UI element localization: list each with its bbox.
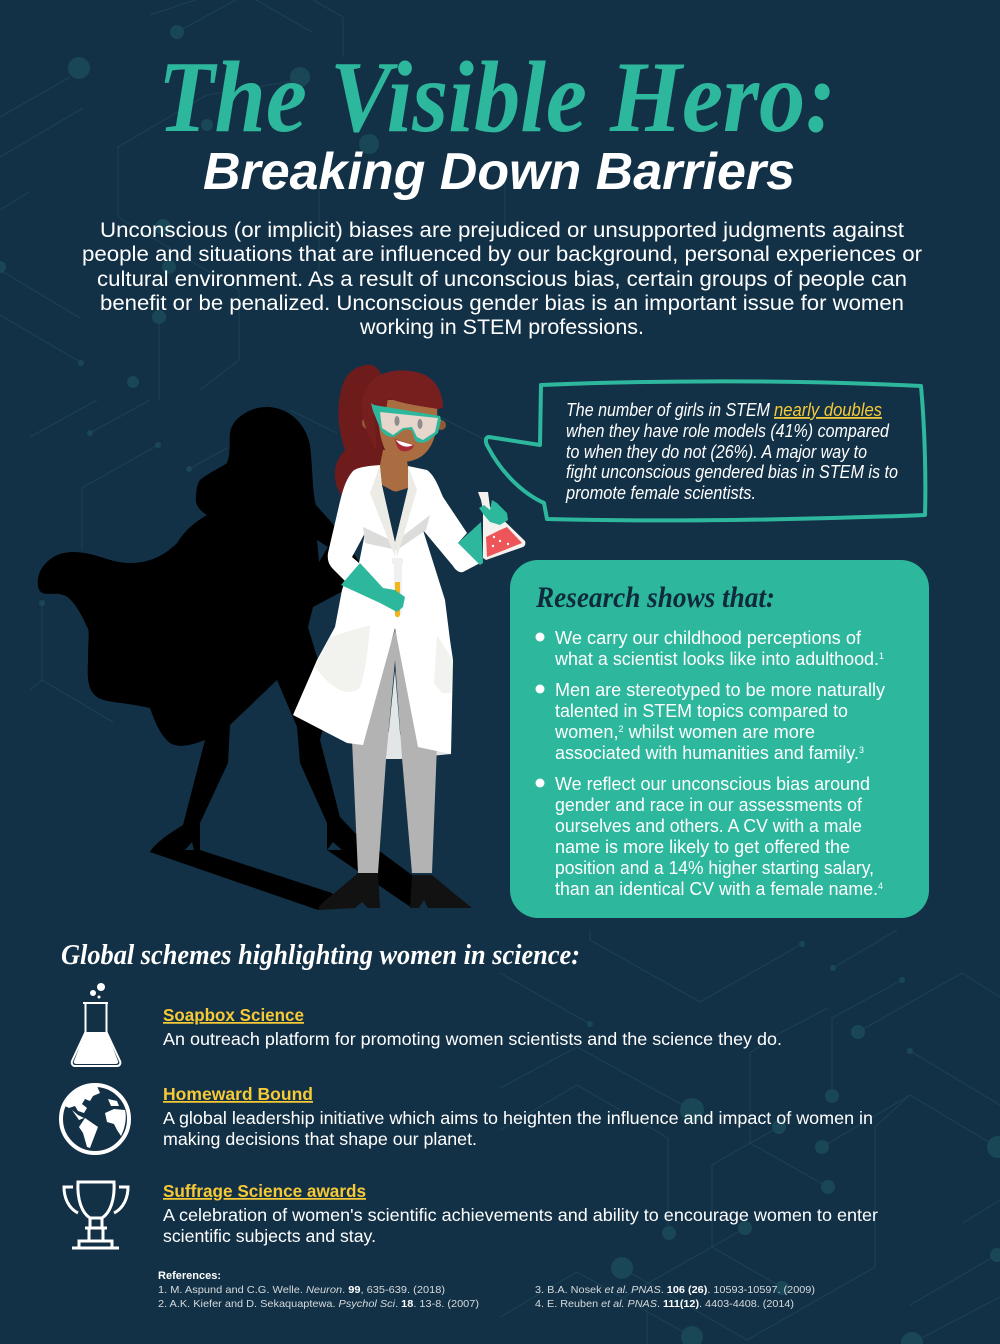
bubble text	[565, 400, 898, 503]
icon: flask	[72, 983, 120, 1066]
bullet 3: than an identical CV with a female name.	[555, 879, 882, 899]
bullet 2: whilst women are more	[624, 722, 815, 742]
neck and chest	[380, 450, 408, 492]
bullet 2: Men are stereotyped to be more naturally	[555, 680, 885, 700]
bullet 3	[536, 774, 883, 899]
scheme: Suffrage Science awards: A celebration of women's scientific achievements and ability to encourage women to enter	[163, 1205, 878, 1225]
section heading: global schemes: Global schemes highlighting women in science:	[61, 939, 580, 971]
bullet 3: gender and race in our assessments of	[555, 795, 863, 815]
bubble text: when they have role models (41%) compared	[566, 421, 890, 441]
bullet 3: ourselves and others. A CV with a male	[555, 816, 862, 836]
flask bubbles	[492, 536, 509, 547]
bullet 1: We carry our childhood perceptions of	[555, 628, 862, 648]
intro paragraph: cultural environment. As a result of unconscious bias, certain groups of people can	[97, 268, 907, 291]
shirt	[382, 485, 408, 542]
icon: trophy	[64, 1182, 128, 1248]
inner skirt lining	[383, 730, 451, 759]
bullet 1: 1	[879, 651, 884, 661]
intro paragraph: Unconscious (or implicit) biases are prejudiced or unsupported judgments against	[100, 219, 904, 242]
bubble text: The number of girls in STEM	[566, 400, 770, 420]
scheme: Soapbox Science: Soapbox Science	[163, 1005, 304, 1025]
ponytail hair	[335, 365, 395, 497]
bullet 2: 2	[618, 724, 624, 734]
scheme: Suffrage Science awards	[163, 1181, 878, 1246]
flask	[478, 492, 525, 560]
speech bubble	[486, 381, 925, 520]
title: The Visible Hero:	[158, 41, 836, 154]
coat pockets	[315, 625, 453, 693]
trousers	[352, 630, 437, 873]
front hair	[362, 370, 443, 450]
scheme: Soapbox Science: An outreach platform for promoting women scientists and the science they do.	[163, 1029, 782, 1049]
bubble text: nearly doubles	[774, 400, 882, 420]
panel: research shows that	[510, 560, 929, 918]
boots	[318, 873, 472, 910]
coat waist shading	[363, 515, 430, 550]
bullet 3: name is more likely to get offered the	[555, 837, 850, 857]
intro paragraph: people and situations that are influenced by our background, personal experiences or	[82, 243, 922, 266]
intro paragraph	[82, 219, 922, 339]
scheme: Homeward Bound: A global leadership initiative which aims to heighten the influence and impact of women in	[163, 1108, 873, 1128]
references: 4. E. Reuben et al. PNAS. 111(12). 4403-4408. (2014)	[535, 1298, 794, 1310]
lab coat	[293, 465, 482, 754]
references: 2. A.K. Kiefer and D. Sekaquaptewa. Psychol Sci. 18. 13-8. (2007)	[158, 1298, 479, 1310]
bullet 2: 3	[859, 745, 864, 755]
bubble text: fight unconscious gendered bias in STEM is to	[566, 462, 898, 482]
bubble text: to when they do not (26%). A major way to	[566, 442, 867, 462]
scheme: Suffrage Science awards: Suffrage Science awards	[163, 1181, 366, 1201]
scheme: Suffrage Science awards: scientific subjects and stay.	[163, 1226, 376, 1246]
bullet 1	[536, 628, 884, 669]
bullet 3: 4	[878, 881, 883, 891]
scientist character	[293, 365, 525, 910]
left glove	[341, 563, 405, 612]
head	[362, 370, 446, 462]
icon: globe	[61, 1085, 129, 1153]
scheme: Homeward Bound: making decisions that shape our planet.	[163, 1129, 477, 1149]
intro paragraph: working in STEM professions.	[359, 316, 644, 339]
scheme: Homeward Bound	[163, 1084, 873, 1149]
bullet 3: We reflect our unconscious bias around	[555, 774, 870, 794]
intro paragraph: benefit or be penalized. Unconscious gender bias is an important issue for women	[100, 292, 904, 315]
panel heading: Research shows that:	[535, 581, 775, 614]
bullet 2: associated with humanities and family.	[555, 743, 861, 763]
scheme: Soapbox Science	[163, 1005, 782, 1049]
subtitle: Breaking Down Barriers	[203, 143, 795, 201]
superhero shadow silhouette	[38, 407, 412, 910]
bullet 1: what a scientist looks like into adulthood.	[555, 649, 880, 669]
scheme: Homeward Bound: Homeward Bound	[163, 1084, 313, 1104]
coat lapels	[370, 465, 417, 557]
right glove	[458, 500, 508, 565]
test tube	[392, 558, 403, 616]
bullet 2: women,	[555, 722, 618, 742]
references: 1. M. Aspund and C.G. Welle. Neuron. 99, 635-639. (2018)	[158, 1284, 445, 1296]
smile	[395, 439, 414, 451]
references: References:	[158, 1270, 221, 1282]
goggles	[371, 403, 441, 443]
bullet 2	[536, 680, 885, 763]
references: 3. B.A. Nosek et al. PNAS. 106 (26). 10593-10597. (2009)	[535, 1284, 815, 1296]
eyes	[394, 416, 400, 426]
bullet 3: position and a 14% higher starting salary,	[555, 858, 874, 878]
bullet 2: talented in STEM topics compared to	[555, 701, 848, 721]
bubble text: promote female scientists.	[565, 483, 756, 503]
references	[158, 1270, 815, 1310]
